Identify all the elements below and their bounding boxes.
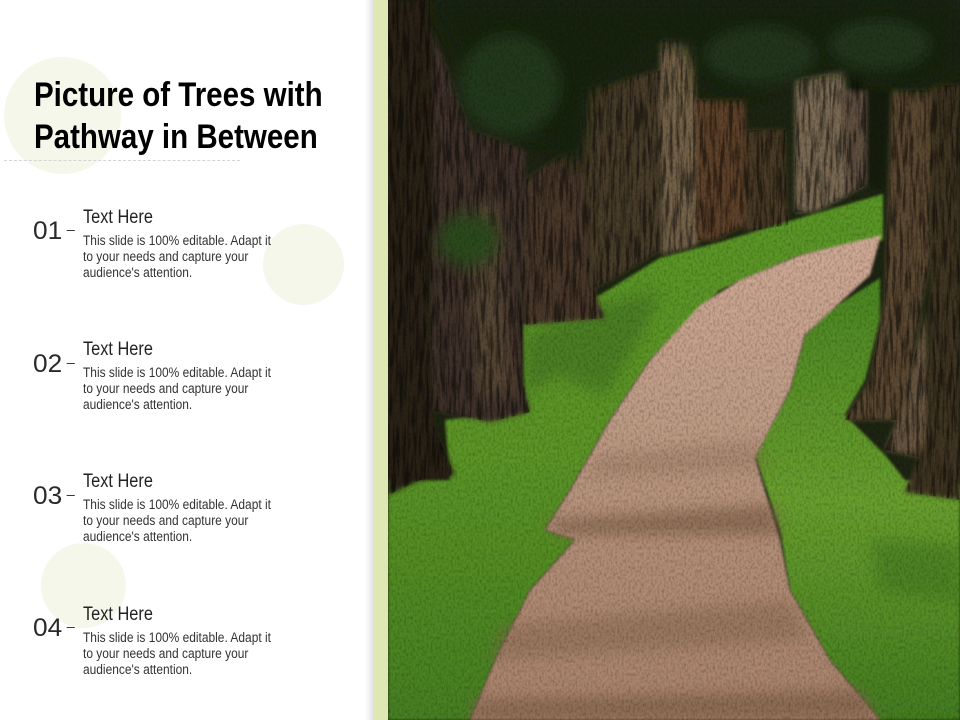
canopy foliage bbox=[430, 0, 960, 266]
number 03 bbox=[33, 482, 75, 510]
path shadows bbox=[470, 440, 880, 720]
text block 01: audience's attention. bbox=[83, 265, 192, 280]
trunk: right front bbox=[905, 85, 960, 500]
title bbox=[34, 76, 323, 156]
decorative circle: behind item 04 bbox=[41, 543, 126, 628]
number 02 bbox=[33, 350, 75, 378]
green accent strip bbox=[373, 0, 388, 720]
trunk: second bbox=[430, 30, 530, 422]
number 02: 02 bbox=[33, 350, 62, 378]
text block 01 bbox=[83, 207, 271, 280]
number 04 bbox=[33, 614, 75, 642]
text block 02: This slide is 100% editable. Adapt it bbox=[83, 365, 271, 380]
distant trunks bbox=[580, 40, 890, 290]
number 02: – bbox=[67, 354, 75, 370]
text block 04: to your needs and capture your bbox=[83, 646, 248, 661]
text block 02: Text Here bbox=[83, 339, 153, 360]
title: Picture of Trees with bbox=[34, 76, 323, 114]
right grass bbox=[755, 278, 960, 720]
text block 02: audience's attention. bbox=[83, 397, 192, 412]
text block 03 bbox=[83, 471, 271, 544]
text block 01: Text Here bbox=[83, 207, 153, 228]
text block 01: This slide is 100% editable. Adapt it bbox=[83, 233, 271, 248]
text block 04: This slide is 100% editable. Adapt it bbox=[83, 630, 271, 645]
trunk: right middle bbox=[845, 90, 935, 420]
photo: tree-lined pathway bbox=[388, 0, 960, 720]
trunk: left big bbox=[388, 0, 455, 495]
bark texture overlay bbox=[388, 0, 960, 500]
grass shade right bbox=[870, 540, 960, 600]
text block 04 bbox=[83, 604, 271, 677]
number 01 bbox=[33, 217, 75, 245]
text block 03: This slide is 100% editable. Adapt it bbox=[83, 497, 271, 512]
pathway bbox=[470, 235, 881, 720]
number 03: 03 bbox=[33, 482, 62, 510]
grass shade bbox=[525, 290, 660, 395]
number 01: – bbox=[67, 221, 75, 237]
decorative circle: behind title bbox=[4, 57, 121, 174]
text block 04: Text Here bbox=[83, 604, 153, 625]
number 01: 01 bbox=[33, 217, 62, 245]
text block 03: to your needs and capture your bbox=[83, 513, 248, 528]
text block 01: to your needs and capture your bbox=[83, 249, 248, 264]
text block 03: Text Here bbox=[83, 471, 153, 492]
text block 02 bbox=[83, 339, 271, 412]
text block 02: to your needs and capture your bbox=[83, 381, 248, 396]
text block 04: audience's attention. bbox=[83, 662, 192, 677]
trunk: mid left bbox=[520, 140, 605, 325]
forest background bbox=[388, 0, 960, 720]
title: Pathway in Between bbox=[34, 118, 318, 156]
trunk: lighter bark highlight bbox=[465, 200, 515, 400]
decorative circle: right of item 01 bbox=[263, 224, 344, 305]
left grass bbox=[388, 194, 883, 720]
number 03: – bbox=[67, 486, 75, 502]
text block 03: audience's attention. bbox=[83, 529, 192, 544]
number 04: – bbox=[67, 618, 75, 634]
grain overlay bbox=[388, 0, 960, 720]
panel shadow bbox=[365, 0, 373, 720]
trunk: right back bbox=[885, 310, 932, 460]
number 04: 04 bbox=[33, 614, 62, 642]
